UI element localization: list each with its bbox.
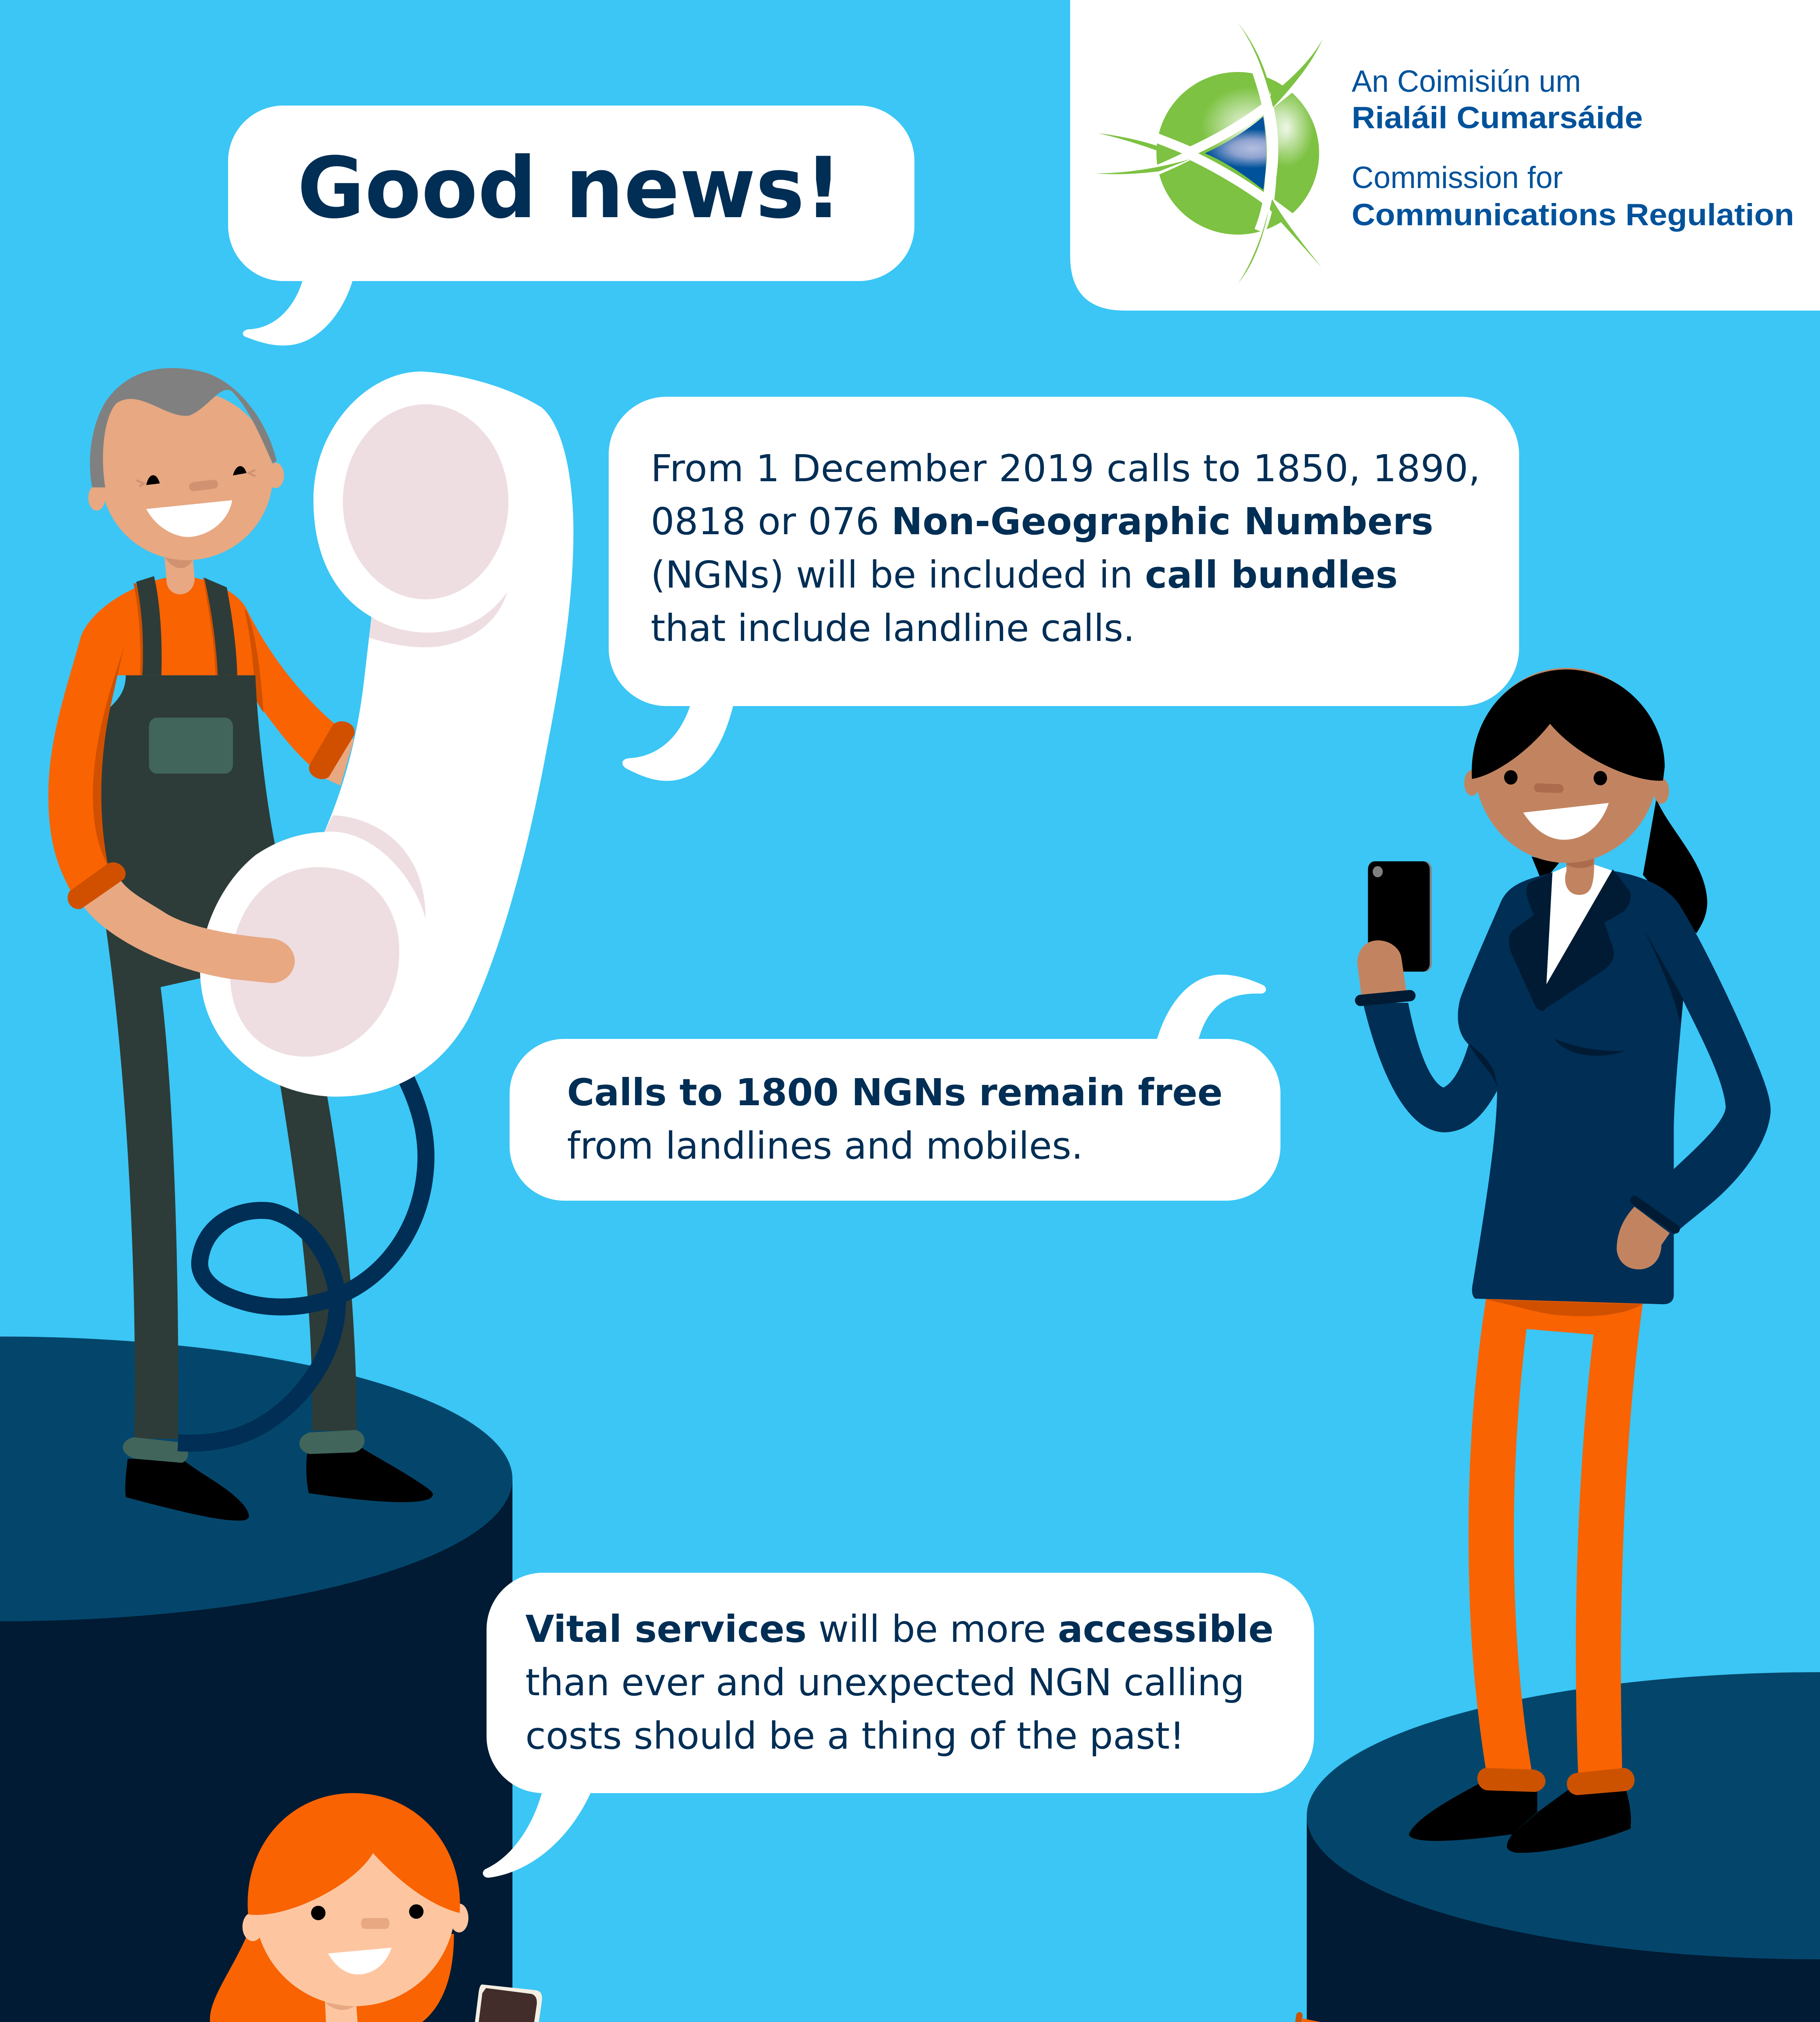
body text: (NGNs) will be included in call bundles: [651, 553, 1398, 596]
pedestal: right: [1307, 1672, 1820, 2022]
logo emblem: [1096, 23, 1323, 284]
hair back: [210, 1934, 454, 2022]
phone: [468, 1984, 542, 2022]
logo text: An Coimisiún um: [1352, 64, 1581, 99]
logo panel: [1070, 0, 1820, 311]
right hand: [309, 731, 354, 786]
logo text: Communications Regulation: [1352, 198, 1794, 232]
neck: [1565, 857, 1594, 895]
character: woman in wheelchair: [28, 1793, 774, 2022]
character: woman in navy jacket: [1357, 668, 1771, 1853]
body text: [651, 447, 1480, 650]
logo text: [1352, 64, 1794, 232]
telephone cord: [178, 1079, 426, 1443]
sleeve cuffs: [68, 863, 125, 909]
speech bubble: call bundles: [609, 397, 1519, 781]
raised hand: [1357, 940, 1407, 995]
neck: [165, 555, 195, 594]
telephone handset: [200, 372, 574, 1097]
shirt: [49, 576, 336, 893]
body text: costs should be a thing of the past!: [525, 1714, 1185, 1758]
head: [1464, 668, 1669, 863]
body text: From 1 December 2019 calls to 1850, 1890,: [651, 447, 1480, 490]
body text: [525, 1607, 1274, 1758]
neck: [325, 2001, 358, 2022]
speech bubble: heading: [228, 106, 914, 345]
logo text: Rialáil Cumarsáide: [1352, 101, 1643, 135]
head: [242, 1793, 468, 2006]
forearm: [81, 879, 295, 983]
speech bubble: vital services: [483, 1573, 1314, 1878]
body text: [567, 1071, 1223, 1168]
lapels: [1509, 869, 1631, 1011]
character: man with flags: [1129, 2012, 1746, 2022]
ponytail: [1532, 799, 1707, 933]
character: man with giant telephone handset: [49, 368, 574, 1521]
body text: 0818 or 076 Non-Geographic Numbers: [651, 500, 1433, 543]
body text: that include landline calls.: [651, 607, 1135, 650]
trouser cuffs: [123, 1437, 188, 1463]
pedestal: upper left: [0, 1337, 512, 2022]
shoes: [1409, 1784, 1537, 1841]
shoes: [125, 1459, 249, 1521]
hand on hip: [1617, 1207, 1670, 1269]
body text: than ever and unexpected NGN calling: [525, 1661, 1244, 1704]
title: Good news!: [297, 140, 842, 237]
body text: Calls to 1800 NGNs remain free: [567, 1071, 1223, 1114]
overalls: [101, 675, 357, 1439]
phone: [1368, 861, 1432, 972]
logo text: Commission for: [1352, 161, 1563, 195]
jacket: [1363, 871, 1771, 1304]
head: [88, 368, 284, 560]
trouser cuffs: [1477, 1768, 1545, 1792]
body text: from landlines and mobiles.: [567, 1124, 1083, 1168]
body text: Vital services will be more accessible: [525, 1607, 1274, 1651]
orange flag 0818: [1269, 2012, 1445, 2022]
speech bubble: 1800 free: [510, 975, 1280, 1201]
trousers: [1469, 1299, 1643, 1775]
shirt: [1546, 865, 1613, 985]
